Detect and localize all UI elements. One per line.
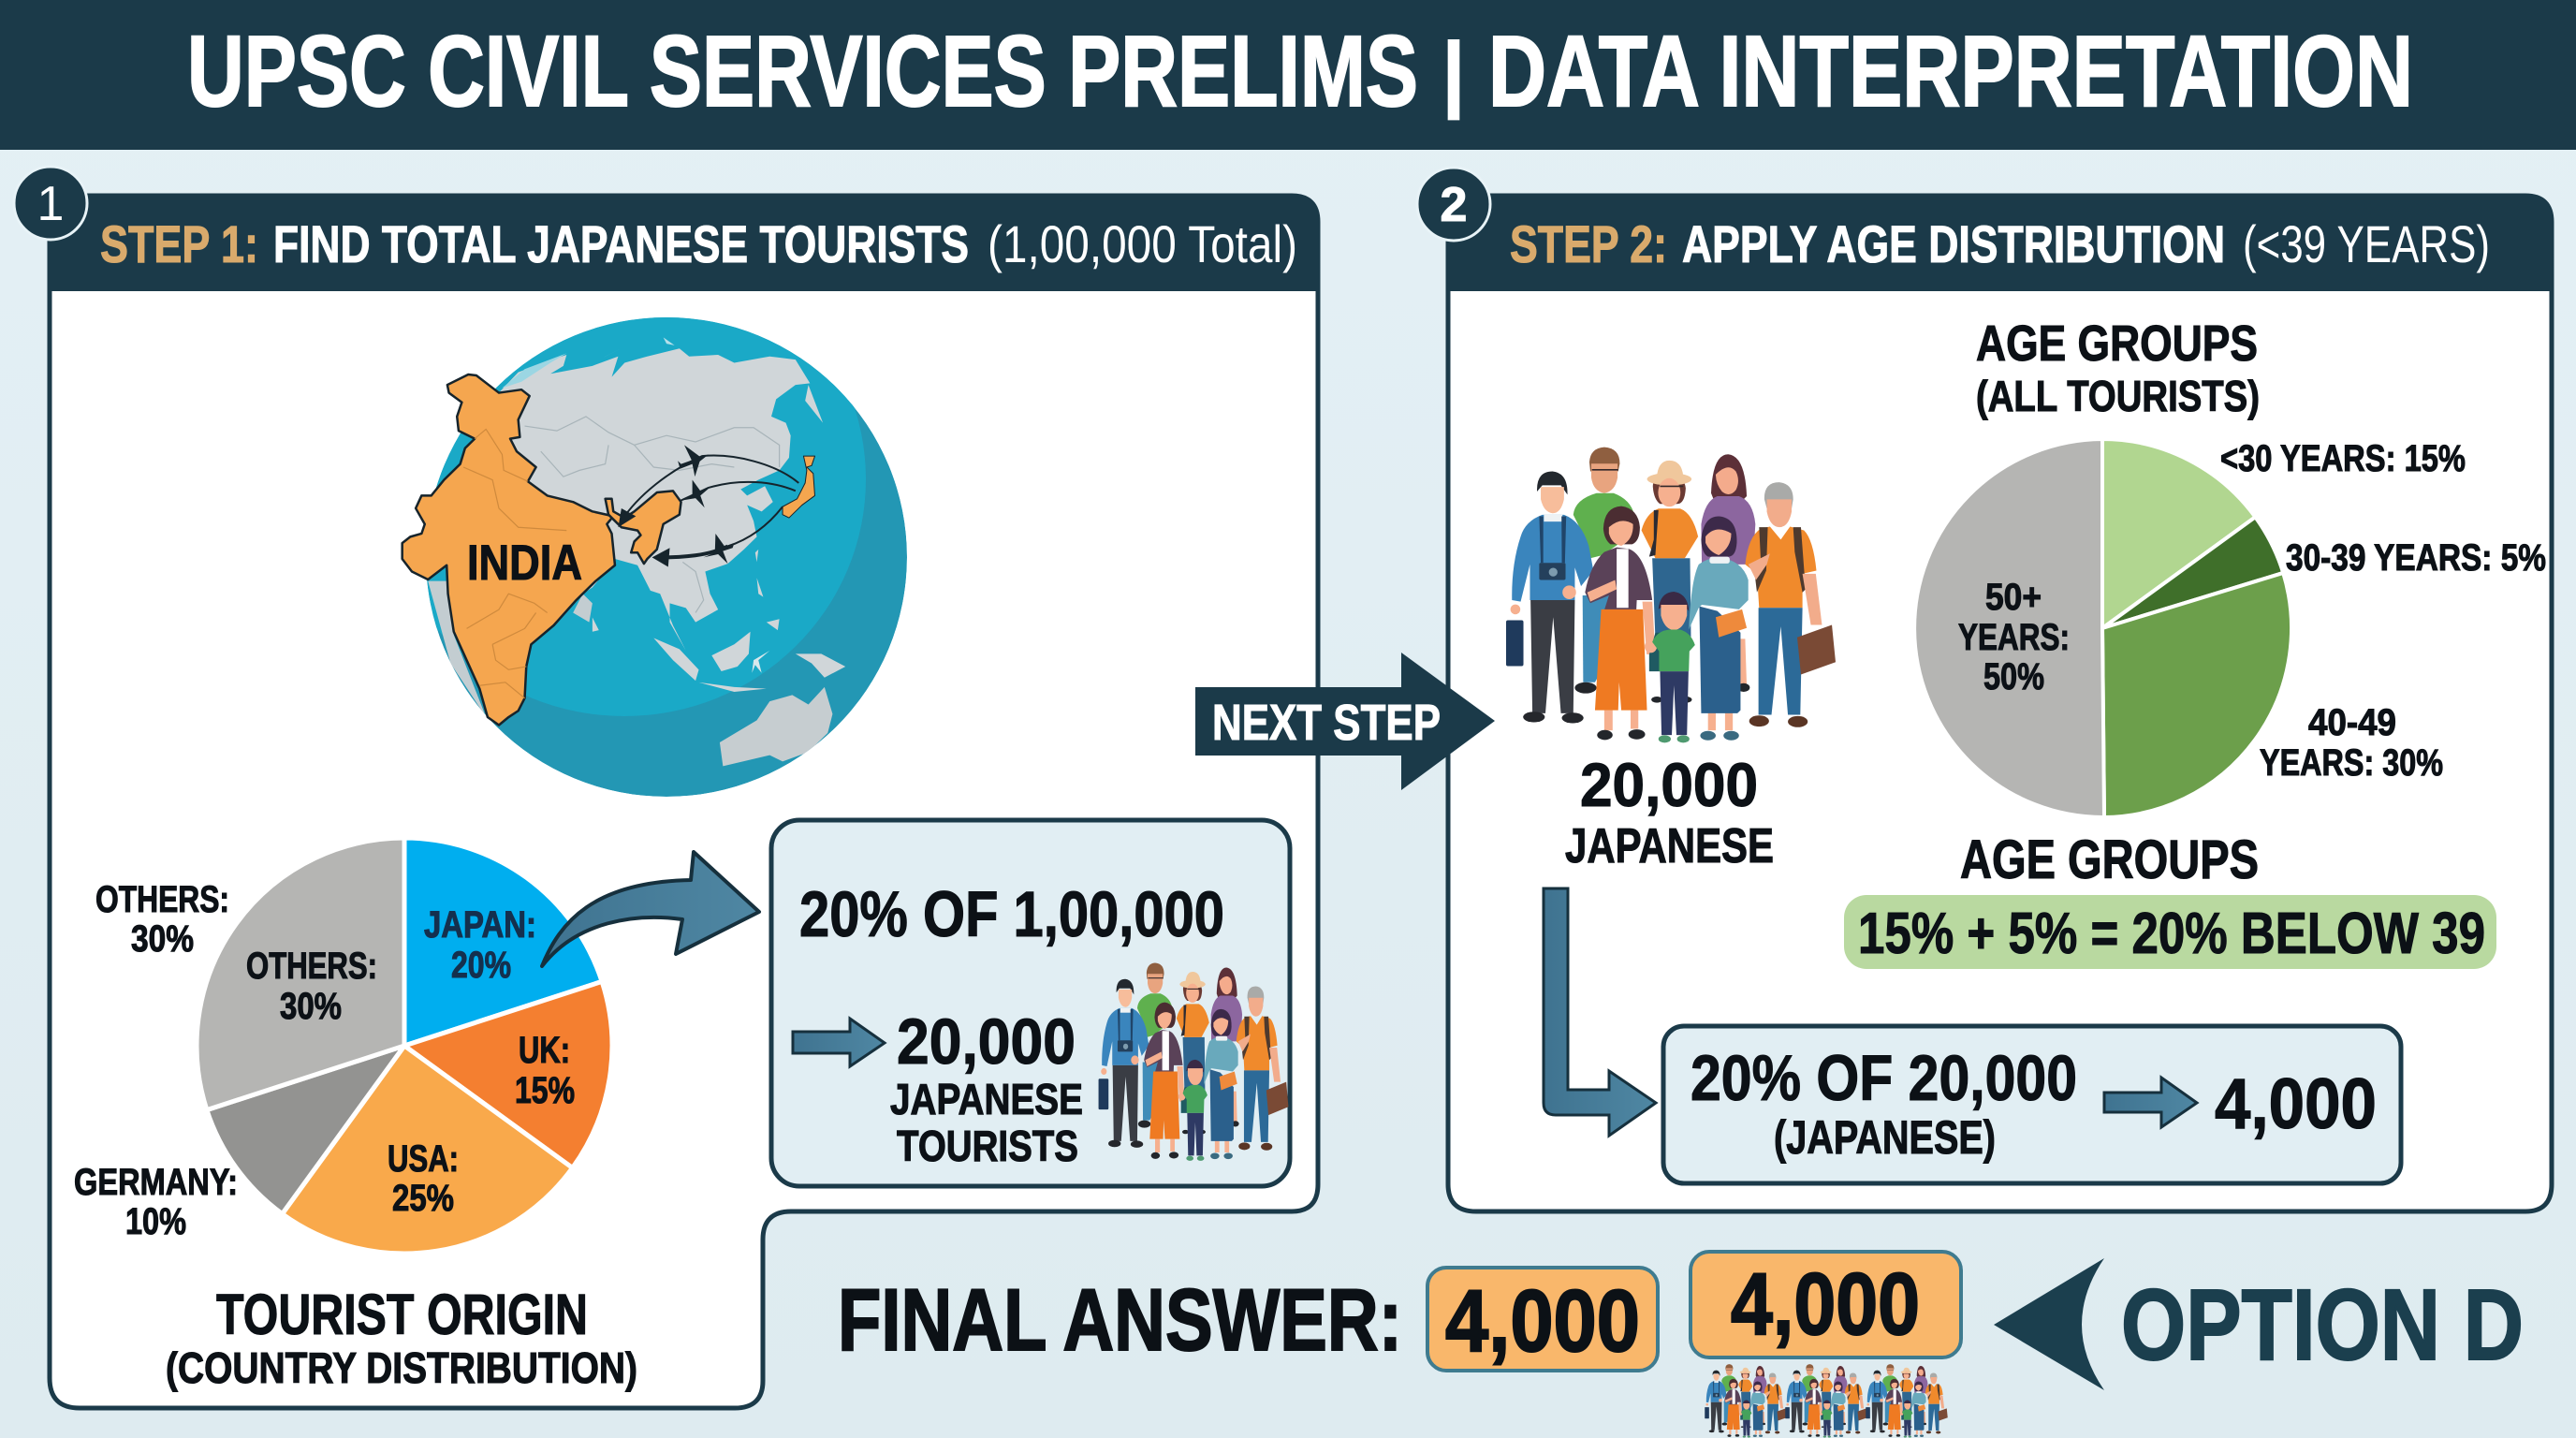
- calculation box: 20% of 20,000: 20% OF 20,000: [1690, 1042, 2077, 1114]
- icon: tourist group large: [1506, 448, 1836, 742]
- icon: tourist group small: [1099, 962, 1288, 1161]
- answer box two: 4,000: [1731, 1255, 1920, 1353]
- title banner: [0, 0, 2576, 150]
- pie chart: tourist origin: GERMANY:: [74, 1162, 238, 1203]
- calculation box: 20% of 20,000: 4,000: [2215, 1064, 2377, 1144]
- 20,000 Japanese label: JAPANESE: [1565, 819, 1774, 873]
- pie caption: TOURIST ORIGIN: [216, 1283, 588, 1346]
- age groups heading: [1976, 315, 2260, 420]
- age groups heading: (ALL TOURISTS): [1976, 372, 2260, 420]
- arrow pointing to answer: [1994, 1258, 2104, 1390]
- icon: crowd of tourists: [1705, 1364, 1948, 1438]
- elbow arrow: [1544, 888, 1656, 1136]
- pie chart: age groups: YEARS: 30%: [2260, 742, 2443, 784]
- final answer section: [838, 1252, 2524, 1438]
- pie chart: tourist origin: 25%: [392, 1178, 454, 1219]
- calculation box: 20% of 1,00,000: [771, 820, 1290, 1186]
- pie chart: tourist origin: OTHERS:: [246, 946, 377, 987]
- pie chart: tourist origin: JAPAN:: [424, 904, 536, 946]
- calculation box: 20% of 1,00,000: 20,000: [897, 1005, 1076, 1078]
- pie chart: tourist origin: 10%: [125, 1201, 186, 1242]
- pie chart: tourist origin: [74, 838, 612, 1254]
- India label: INDIA: [467, 536, 582, 591]
- calculation box: 20% of 1,00,000: 20% OF 1,00,000: [799, 878, 1224, 950]
- pie chart: tourist origin: USA:: [388, 1138, 459, 1180]
- pie chart: tourist origin: 30%: [131, 918, 194, 960]
- step 2 header: APPLY AGE DISTRIBUTION: [1682, 214, 2225, 273]
- arrow to 4,000: [2104, 1078, 2197, 1127]
- calculation box: 20% of 20,000: (JAPANESE): [1774, 1111, 1996, 1164]
- calculation box: 20% of 1,00,000: JAPANESE: [890, 1075, 1083, 1123]
- globe with India and flight routes: [401, 317, 907, 797]
- pie chart: tourist origin: 20%: [451, 945, 511, 986]
- curved arrow from Japan slice: [542, 852, 759, 966]
- final answer section: FINAL ANSWER:: [838, 1270, 1402, 1369]
- pie chart: age groups: 40-49: [2308, 702, 2396, 743]
- age groups summary: [1844, 829, 2496, 969]
- 20,000 Japanese label: 20,000: [1580, 750, 1758, 819]
- step 1 header: (1,00,000 Total): [988, 214, 1297, 273]
- pie caption: (COUNTRY DISTRIBUTION): [166, 1343, 637, 1392]
- pie chart: age groups: 50+: [1985, 577, 2042, 618]
- next step arrow: NEXT STEP: [1212, 695, 1441, 751]
- step 2 header: (<39 YEARS): [2243, 214, 2490, 273]
- step 1 header: [50, 194, 1318, 291]
- calculation box: 20% of 20,000: [1663, 1026, 2401, 1183]
- pie chart: age groups: 50%: [1983, 656, 2044, 697]
- pie chart: tourist origin: 30%: [280, 986, 342, 1027]
- step 2 number badge: [1417, 168, 1490, 241]
- panel: step 2: [1417, 168, 2552, 1211]
- pie chart: age groups: [1914, 438, 2546, 817]
- 20,000 Japanese label: [1565, 750, 1774, 873]
- title banner: UPSC CIVIL SERVICES PRELIMS: [187, 14, 1418, 127]
- step 1 number badge: [14, 167, 87, 240]
- calculation box: 20% of 1,00,000: TOURISTS: [897, 1122, 1078, 1170]
- step 1 header: STEP 1:: [100, 214, 258, 273]
- age groups summary: AGE GROUPS: [1960, 829, 2259, 890]
- pie chart: age groups: YEARS:: [1958, 617, 2070, 658]
- arrow to 20,000: [793, 1019, 885, 1066]
- pie chart: tourist origin: OTHERS:: [95, 879, 229, 920]
- pie chart: tourist origin: UK:: [519, 1030, 570, 1071]
- pie chart: age groups: <30 YEARS: 15%: [2220, 438, 2466, 479]
- step 2 header: STEP 2:: [1510, 214, 1667, 273]
- title banner: |: [1442, 26, 1466, 121]
- step 1 header: FIND TOTAL JAPANESE TOURISTS: [273, 214, 969, 273]
- step 2 number badge: 2: [1441, 178, 1467, 232]
- answer box one: 4,000: [1445, 1271, 1640, 1370]
- pie caption: [166, 1283, 637, 1392]
- pie chart: tourist origin: 15%: [515, 1070, 575, 1111]
- panel: step 1: [14, 167, 1318, 1408]
- age groups heading: AGE GROUPS: [1976, 315, 2258, 372]
- next step arrow: [1195, 653, 1495, 790]
- step 1 number badge: 1: [37, 177, 64, 231]
- step 2 header: [1448, 194, 2552, 291]
